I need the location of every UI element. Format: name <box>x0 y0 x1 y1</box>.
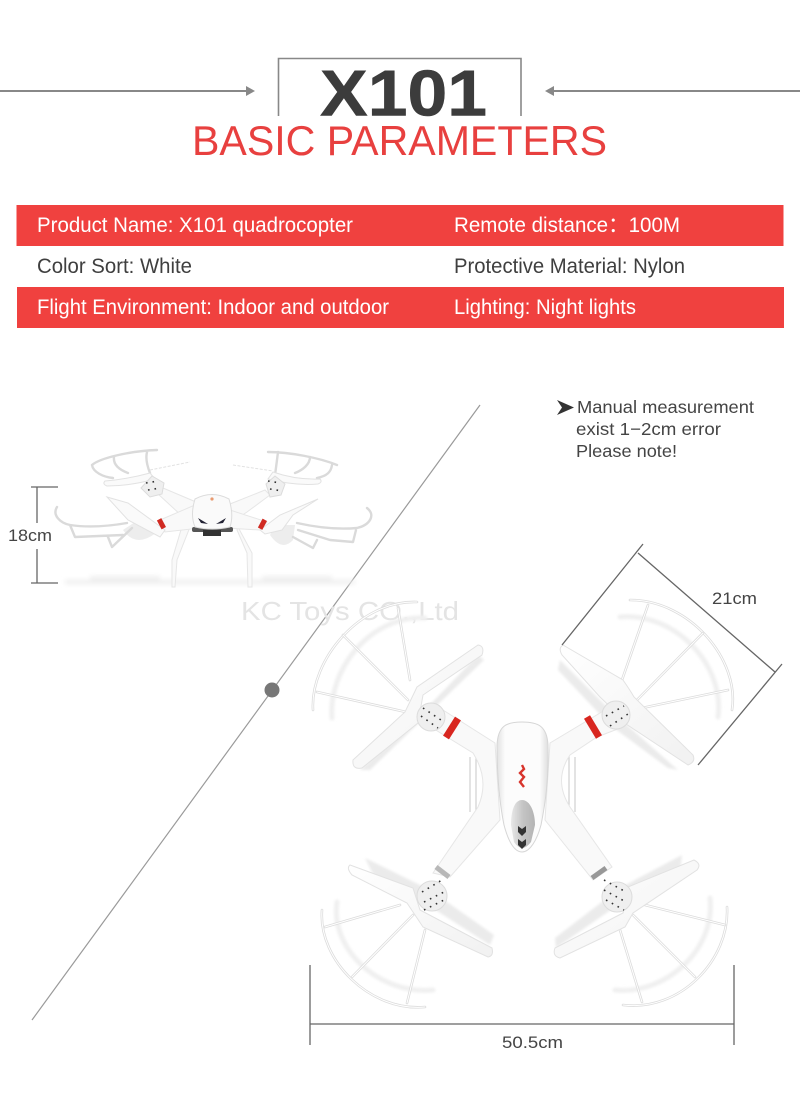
rotor: top right <box>558 600 733 770</box>
brand mark <box>520 765 524 787</box>
nose panel <box>511 800 535 848</box>
blade <box>554 860 699 958</box>
guard spokes <box>620 905 725 1002</box>
front left guard <box>55 507 132 547</box>
guard spokes <box>325 905 425 1003</box>
row 3: lighting: Lighting: Night lights <box>454 296 636 319</box>
row 3: flight environment: Flight Environment: Indoor and outdoor <box>37 296 389 319</box>
guard spokes <box>317 608 410 712</box>
front left blade <box>107 497 165 537</box>
span dimension 50.5cm <box>310 965 734 1052</box>
guard ring <box>630 600 733 710</box>
divider dot <box>264 682 280 698</box>
note text: Please note! <box>576 441 677 461</box>
guard spokes <box>622 605 728 708</box>
arm width dimension 21cm <box>562 544 782 765</box>
blade <box>560 645 694 765</box>
front right blade <box>260 499 318 534</box>
parameter table <box>16 205 784 328</box>
rear hubs <box>141 476 285 497</box>
height dimension 18cm <box>8 487 58 583</box>
heading: basic parameters: BASIC PARAMETERS <box>192 117 607 164</box>
icon: arrowhead bullet <box>557 400 574 415</box>
arrow: right pointing inward <box>545 86 800 96</box>
left arms <box>423 710 500 877</box>
row 1: product name: Product Name: X101 quadrocopter <box>37 214 353 237</box>
row 2: protective material: Protective Material: Nylon <box>454 255 685 278</box>
row 2: color sort: Color Sort: White <box>37 255 192 278</box>
landing legs <box>172 523 252 587</box>
rear left antenna line <box>150 462 190 470</box>
guard ring <box>623 907 727 1006</box>
rear left guard <box>92 450 157 478</box>
guard shadow <box>332 618 425 718</box>
blade <box>353 645 483 768</box>
row 1 band <box>16 205 784 246</box>
rear right guard <box>268 452 337 478</box>
rear arm silver bands <box>436 867 606 878</box>
guard shadow <box>615 898 710 990</box>
front left motor <box>123 522 160 540</box>
blade shadow <box>555 855 682 948</box>
fuselage <box>497 722 548 852</box>
camera and underside <box>192 527 233 536</box>
red arm bands <box>446 717 599 738</box>
front arms <box>160 505 267 532</box>
rotor: top left <box>313 602 484 770</box>
rear right antenna line <box>233 465 273 471</box>
top view drone <box>313 600 733 1007</box>
front right guard <box>293 508 371 548</box>
title: X101: X101 <box>320 56 487 130</box>
note text: Manual measurement <box>577 397 754 417</box>
guard ring <box>322 910 425 1007</box>
front right motor <box>270 525 295 545</box>
header: model name with frame and arrows <box>0 56 800 130</box>
height label: 18cm <box>8 526 52 545</box>
note text: exist 1−2cm error <box>576 419 721 439</box>
side view drone <box>55 450 371 587</box>
nose arrows <box>518 826 526 849</box>
blade shadow <box>360 655 484 770</box>
rotor: bottom right <box>554 855 727 1006</box>
rear left blade <box>104 473 155 486</box>
guard shadow <box>336 902 433 990</box>
rear right blade <box>268 472 321 484</box>
motor housings <box>417 701 632 912</box>
watermark: KC Toys CO.,Ltd <box>241 596 459 626</box>
body eyes and logo <box>198 497 226 524</box>
red arm marks <box>157 518 267 530</box>
body <box>192 494 232 529</box>
right arms <box>545 710 623 880</box>
ground shadow <box>65 576 355 584</box>
blade <box>348 865 492 957</box>
row 3 band <box>17 287 784 328</box>
row 1: remote distance: Remote distance：100M <box>454 214 680 237</box>
title frame <box>278 58 521 116</box>
note: manual measurement <box>557 397 754 461</box>
span label: 50.5cm <box>502 1033 563 1052</box>
blade shadow <box>558 660 678 770</box>
blade shadow <box>365 858 494 945</box>
diagonal divider <box>32 405 480 1020</box>
rotor: bottom left <box>322 858 494 1007</box>
arm width label: 21cm <box>712 589 757 608</box>
guard ring <box>313 602 417 710</box>
landing gear <box>470 755 575 812</box>
guard shadow <box>620 617 719 717</box>
arrow: left pointing inward <box>0 86 255 96</box>
rear arms <box>157 488 270 522</box>
